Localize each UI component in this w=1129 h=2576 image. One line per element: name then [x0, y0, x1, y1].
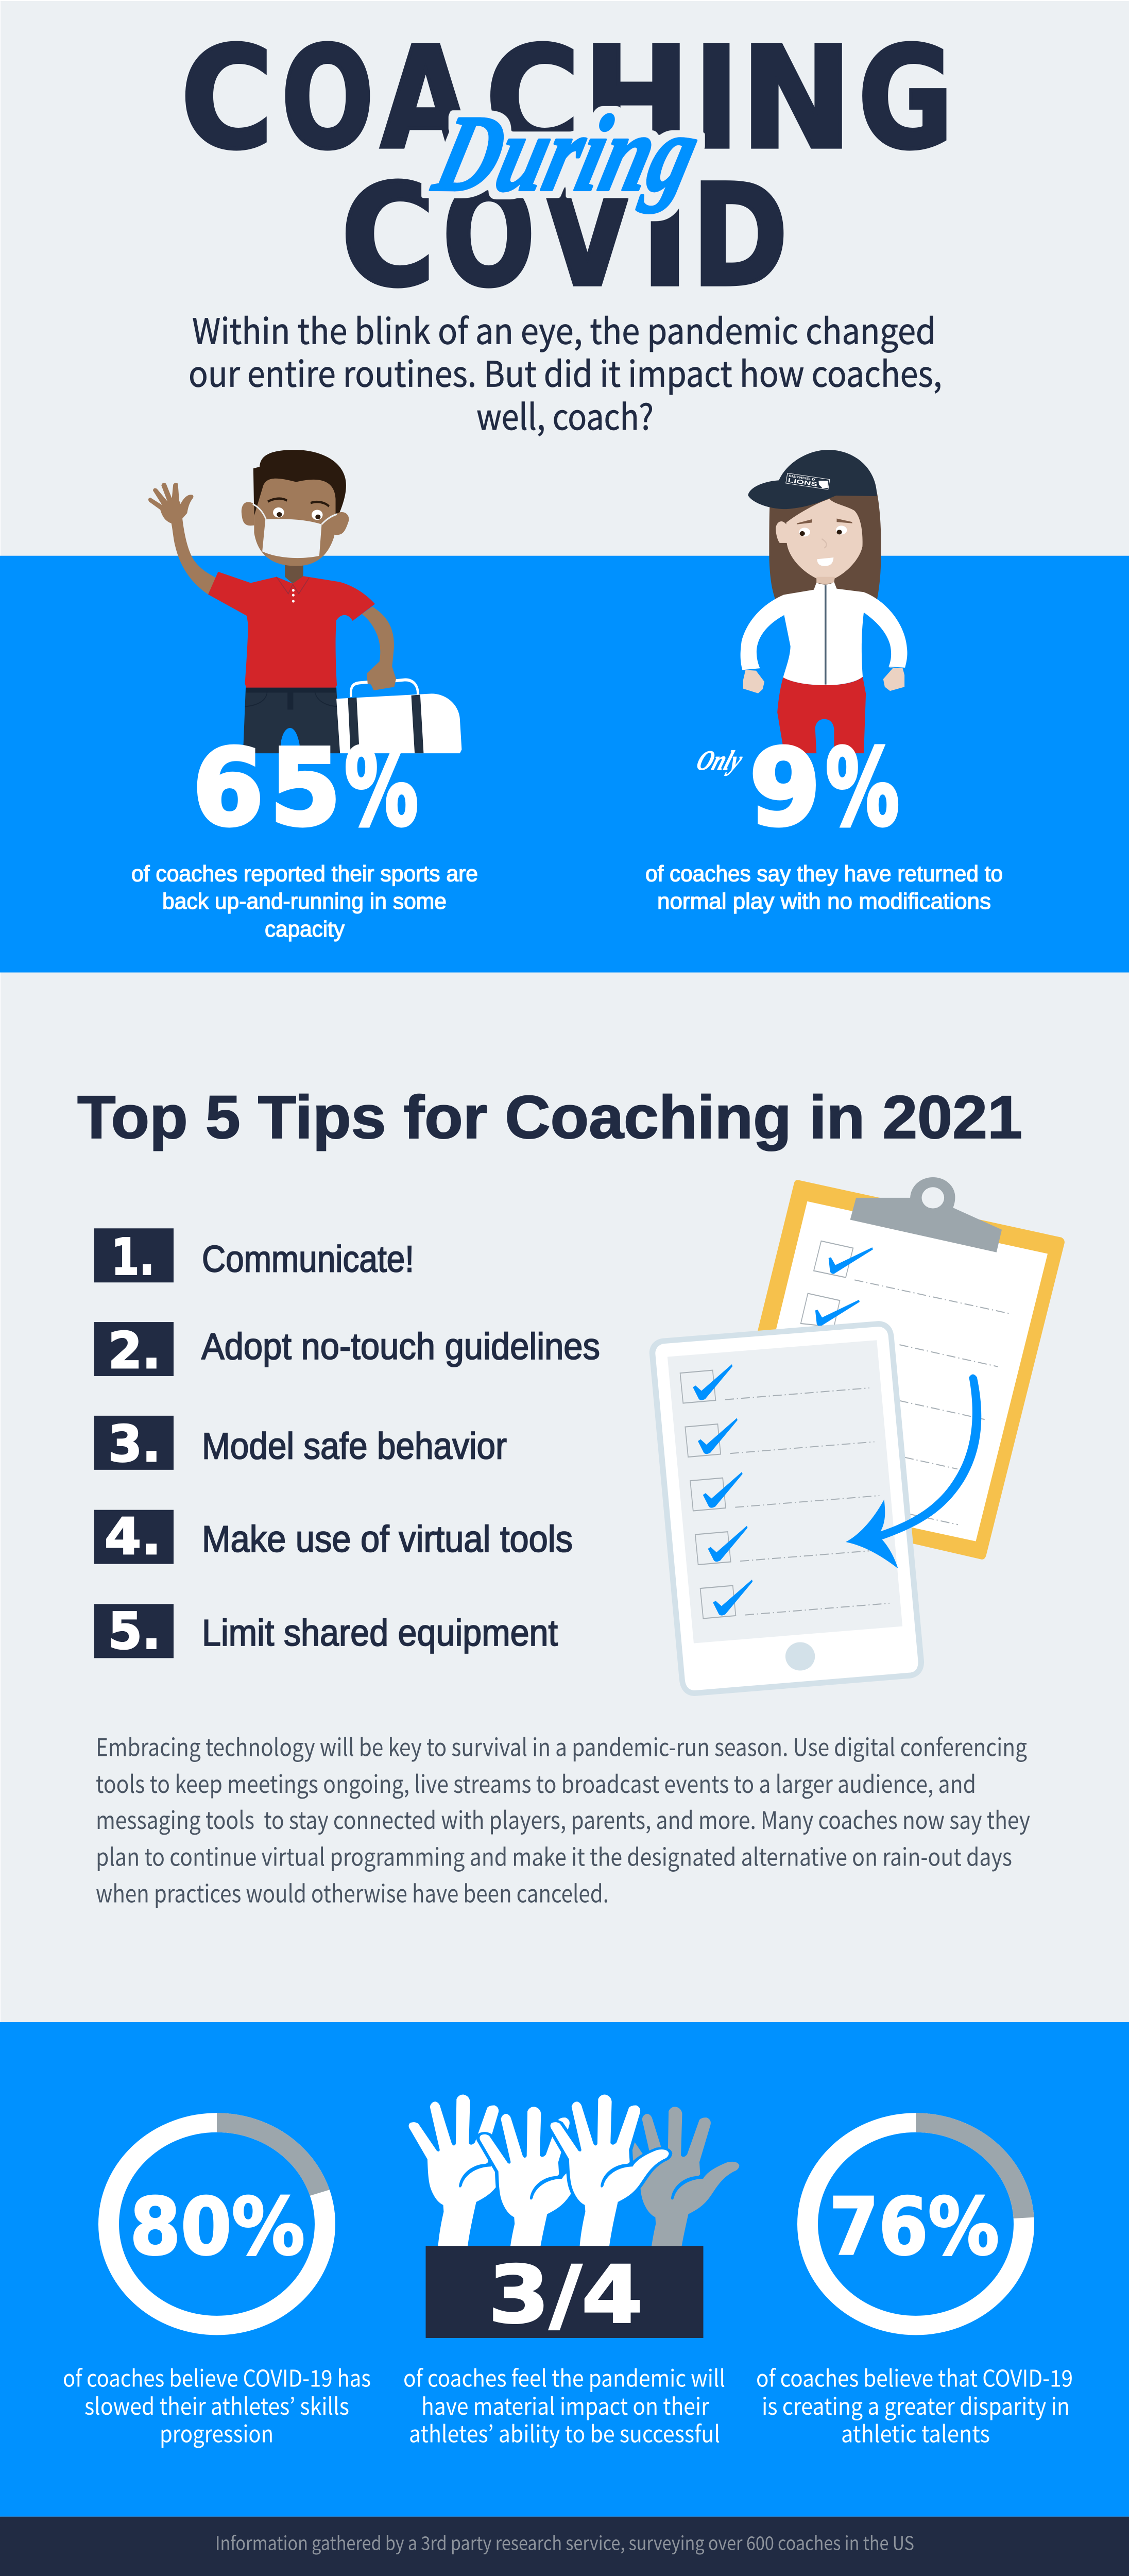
intro text: Within the blink of an eye, the pandemic changed: [192, 303, 936, 354]
intro text: well, coach?: [476, 389, 654, 440]
title: [181, 17, 953, 318]
intro text: our entire routines. But did it impact how coaches,: [189, 346, 942, 397]
title: COVID: I: [641, 155, 689, 318]
title: COACHING: A: [381, 17, 472, 180]
title: During script: During: [423, 93, 711, 213]
tip 2: [94, 1321, 600, 1380]
tablet: [649, 1321, 924, 1696]
illustration: man in mask with duffel bag: [148, 450, 461, 753]
caption: 80%: slowed their athletes’ skills: [84, 2388, 349, 2422]
caption: 65%: [131, 862, 478, 942]
title: COACHING: C: [486, 17, 580, 180]
paragraph: embracing technology: [96, 1728, 1030, 1909]
title: COVID: O: [442, 155, 535, 318]
stat: 65%: 6: [193, 726, 264, 849]
caption: 3/4: of coaches feel the pandemic will: [403, 2360, 725, 2394]
panel: footer: [0, 2517, 1129, 2576]
title: COACHING: I: [694, 17, 739, 180]
caption: 3/4: have material impact on their: [421, 2388, 710, 2422]
stat: 65%: %: [345, 726, 418, 849]
panel: top blue band: [0, 556, 1129, 973]
tip 1: Communicate!: [202, 1238, 414, 1280]
title: COVID: D: [692, 155, 788, 318]
caption: 76%: of coaches believe that COVID-19: [756, 2360, 1073, 2394]
label: Only: Only: [693, 745, 747, 776]
tip 2: Adopt no-touch guidelines: [201, 1325, 600, 1367]
chart: 76% ring: 76%: [829, 2181, 999, 2273]
tip 5: [94, 1602, 558, 1660]
tip 1: 1.: [111, 1227, 155, 1286]
caption: 76%: athletic talents: [841, 2416, 990, 2449]
caption: 80%: [63, 2360, 371, 2449]
panel: bottom blue band: [0, 2022, 1129, 2517]
tip 5: Limit shared equipment: [202, 1612, 558, 1653]
tip 4: [94, 1507, 573, 1566]
title: COACHING: C: [181, 17, 273, 180]
tip 4: 4.: [105, 1507, 161, 1566]
title: COVID: V: [542, 155, 634, 318]
illustration: raised hands: [409, 2094, 739, 2259]
arrow: [846, 1375, 981, 1569]
title: COACHING: G: [858, 17, 953, 180]
footer source note: Information gathered by a 3rd party research service, surveying over 600 coaches in the US: [215, 2528, 914, 2555]
cap logo: [786, 473, 830, 489]
caption: 9%: normal play with no modifications: [657, 889, 991, 913]
caption: 65%: of coaches reported their sports are: [131, 862, 478, 886]
cap logo: LIONS: [788, 477, 818, 488]
caption: 65%: back up-and-running in some: [162, 889, 447, 913]
intro text: [189, 303, 942, 440]
stat: 65%: 5: [270, 726, 341, 849]
stat: 9%: 9: [749, 726, 820, 849]
tip 4: Make use of virtual tools: [202, 1518, 573, 1560]
title: COACHING: O: [281, 17, 374, 180]
tip 3: 3.: [108, 1414, 161, 1473]
tip 1: [94, 1227, 414, 1286]
illustration: clipboard and tablet checklists: [649, 1177, 1065, 1696]
paragraph: embracing technology: when practices would otherwise have been canceled.: [96, 1874, 609, 1909]
cap logo: SMITHFIELD: [789, 474, 816, 482]
stat box: 3/4: [425, 2246, 704, 2341]
caption: 76%: is creating a greater disparity in: [762, 2388, 1070, 2422]
tip 3: [94, 1414, 507, 1473]
clipboard: [737, 1177, 1065, 1560]
caption: 65%: capacity: [265, 917, 345, 942]
title: COACHING: H: [583, 17, 690, 180]
caption: 3/4: athletes’ ability to be successful: [409, 2416, 720, 2449]
tip 5: 5.: [108, 1602, 161, 1660]
chart: 80% ring: [109, 2123, 325, 2326]
caption: 9%: of coaches say they have returned to: [645, 862, 1003, 886]
chart: 80% ring: 80%: [130, 2181, 305, 2273]
caption: 76%: [756, 2360, 1073, 2449]
caption: 80%: of coaches believe COVID-19 has: [63, 2360, 371, 2394]
heading: top 5 tips: Top 5 Tips for Coaching in 2021: [77, 1083, 1022, 1151]
caption: 3/4: [403, 2360, 725, 2449]
list: tips: [94, 1227, 600, 1660]
tip 2: 2.: [108, 1321, 161, 1380]
title: COACHING: N: [741, 17, 852, 180]
title: COVID: C: [341, 155, 435, 318]
stat box: 3/4: 3/4: [488, 2249, 643, 2341]
stat: 9%: %: [826, 726, 899, 849]
chart: 76% ring: [808, 2123, 1024, 2326]
caption: 9%: [645, 862, 1003, 913]
tip 3: Model safe behavior: [202, 1425, 507, 1467]
illustration: woman with cap: [741, 450, 907, 753]
caption: 80%: progression: [160, 2416, 273, 2449]
